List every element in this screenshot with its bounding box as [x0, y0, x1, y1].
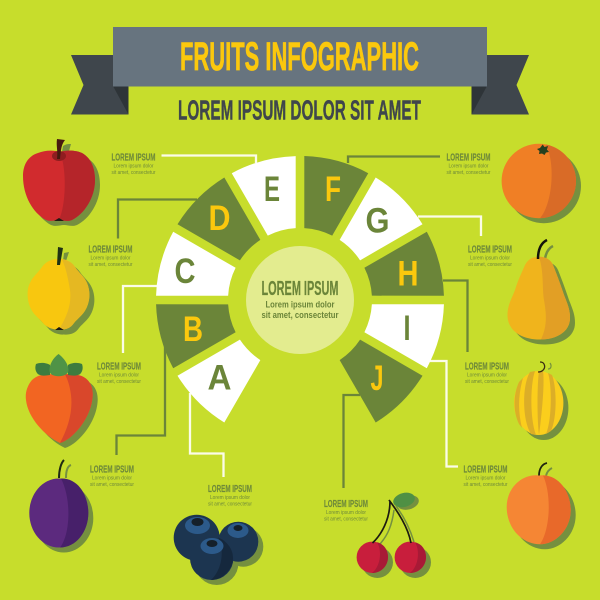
- label: orange: LOREM IPSUM: [446, 152, 490, 164]
- label: plum: sit amet, consectetur: [90, 482, 134, 488]
- icon: apple: [23, 139, 100, 226]
- segment D: D: [208, 199, 230, 238]
- label: pear: [468, 244, 512, 268]
- label: quince: sit amet, consectetur: [88, 262, 133, 268]
- label: persimmon: sit amet, consectetur: [97, 379, 141, 385]
- label: cherries: sit amet, consectetur: [324, 516, 368, 522]
- label: cherries: [324, 499, 368, 522]
- label: quince: LOREM IPSUM: [88, 244, 132, 256]
- segment A: [169, 322, 264, 423]
- segment A: A: [208, 358, 232, 398]
- icon: plum: [29, 460, 93, 552]
- label: peach: sit amet, consectetur: [464, 482, 508, 488]
- label: quince: [88, 244, 133, 268]
- banner ribbon: [71, 27, 529, 114]
- icon: quince: [28, 247, 94, 335]
- segment H: [358, 232, 459, 327]
- icon: blueberries: [174, 515, 263, 585]
- icon: peach: [507, 463, 576, 549]
- label: apple: LOREM IPSUM: [112, 152, 156, 164]
- segment C: [156, 232, 236, 296]
- label: apple: Lorem ipsum dolor: [114, 164, 154, 170]
- segment I: I: [404, 309, 410, 348]
- label: pear: sit amet, consectetur: [468, 262, 512, 268]
- icon: melon: [514, 362, 568, 440]
- label: plum: LOREM IPSUM: [90, 464, 134, 476]
- label: orange: sit amet, consectetur: [446, 170, 491, 176]
- center circle with text: Lorem ipsum dolor: [266, 300, 335, 310]
- segment C: C: [174, 252, 196, 291]
- label: blueberries: Lorem ipsum dolor: [210, 495, 250, 501]
- segment F: F: [325, 170, 341, 209]
- center circle with text: [246, 246, 354, 354]
- icon: persimmon: [26, 354, 98, 448]
- icon: pear: [508, 240, 575, 344]
- label: plum: Lorem ipsum dolor: [92, 476, 132, 482]
- segment E: E: [264, 170, 280, 209]
- label: melon: sit amet, consectetur: [465, 379, 509, 385]
- label: cherries: Lorem ipsum dolor: [326, 510, 366, 516]
- label: persimmon: LOREM IPSUM: [97, 362, 141, 372]
- label: orange: Lorem ipsum dolor: [448, 164, 489, 170]
- label: peach: LOREM IPSUM: [464, 464, 508, 476]
- icon: orange: [502, 144, 581, 223]
- segment B: [141, 273, 242, 368]
- label: persimmon: [97, 362, 141, 385]
- segment B: B: [183, 310, 203, 349]
- segment E: [232, 141, 327, 242]
- segment G: G: [366, 202, 390, 240]
- label: blueberries: sit amet, consectetur: [208, 502, 252, 508]
- segmented ring chart: [141, 141, 459, 431]
- label: plum: [90, 464, 134, 488]
- label: peach: [464, 464, 508, 488]
- segment H: H: [398, 254, 418, 294]
- segment J: J: [370, 359, 384, 398]
- segment I: [364, 304, 444, 368]
- label: pear: Lorem ipsum dolor: [470, 256, 510, 262]
- label: melon: Lorem ipsum dolor: [467, 372, 507, 378]
- segment F: [304, 156, 368, 236]
- segment J: [322, 336, 423, 431]
- center circle with text: LOREM IPSUM: [262, 278, 338, 300]
- label: melon: LOREM IPSUM: [465, 362, 509, 372]
- segment G: [336, 177, 431, 278]
- label: pear: LOREM IPSUM: [468, 244, 512, 256]
- label: blueberries: LOREM IPSUM: [208, 484, 252, 495]
- center circle with text: sit amet, consectetur: [262, 310, 339, 320]
- label: melon: [465, 362, 509, 385]
- label: blueberries: [208, 484, 252, 508]
- label: cherries: LOREM IPSUM: [324, 499, 368, 510]
- icon: cherries: [357, 490, 431, 578]
- label: apple: sit amet, consectetur: [112, 170, 156, 176]
- label: quince: Lorem ipsum dolor: [90, 256, 131, 262]
- label: apple: [112, 152, 156, 176]
- segment D: [177, 169, 278, 264]
- label: orange: [446, 152, 491, 176]
- connector lines: [116, 156, 481, 488]
- label: persimmon: Lorem ipsum dolor: [99, 372, 139, 378]
- label: peach: Lorem ipsum dolor: [466, 476, 506, 482]
